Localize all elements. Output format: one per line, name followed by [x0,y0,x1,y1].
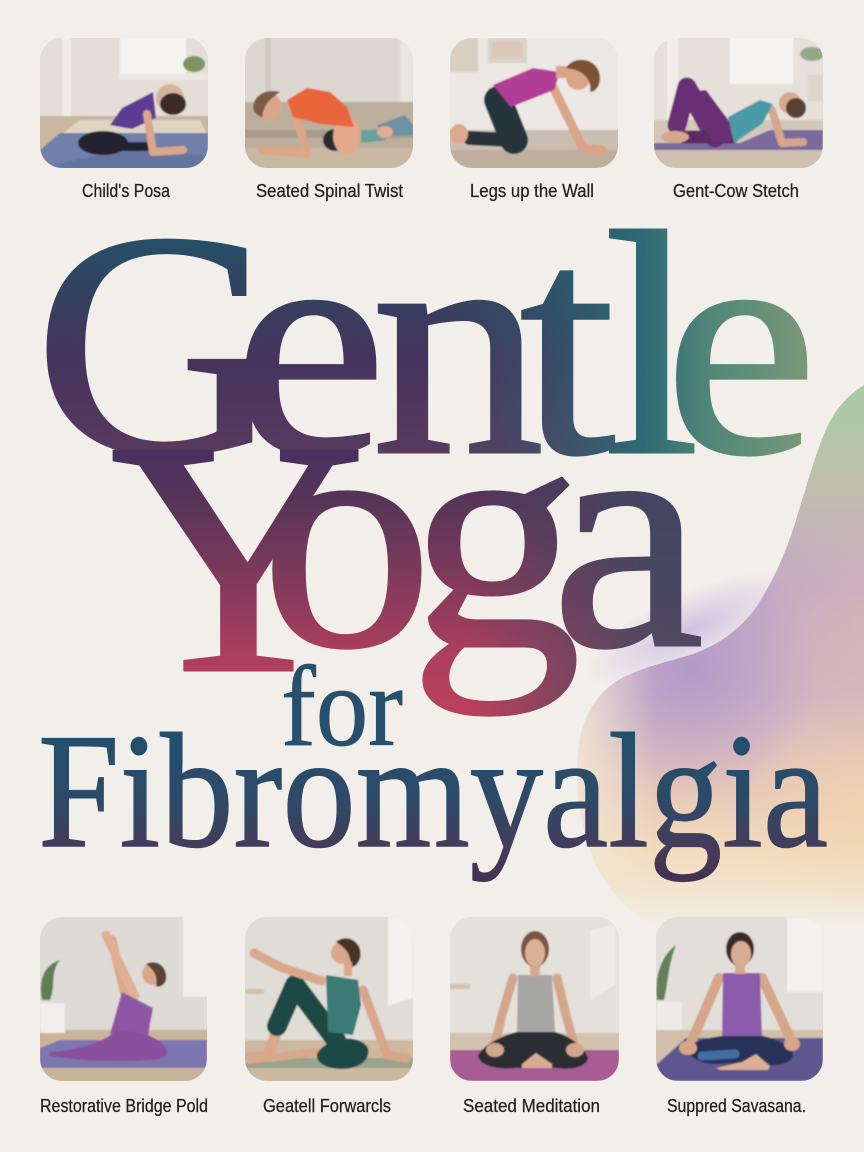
label: Gent-Cow Stetch: Gent-Cow Stetch [673,181,799,201]
pose card: Legs up the Wall [448,36,620,201]
label: Seated Spinal Twist: Seated Spinal Twist [256,181,403,201]
label: Restorative Bridge Pold: Restorative Bridge Pold [40,1096,208,1116]
pose card: Seated Spinal Twist [243,36,415,201]
label: Legs up the Wall: Legs up the Wall [470,181,594,201]
pose card: Restorative Bridge Pold [38,915,209,1116]
photo: gentle forward [243,915,415,1083]
label: Geatell Forwarcls: Geatell Forwarcls [263,1096,391,1116]
panel: top row of poses [38,36,825,201]
photo: restorative bridge [38,915,209,1083]
title line: Gentle: Gentle [34,168,818,522]
photo: legs up the wall [448,36,620,170]
label: Seated Meditation: Seated Meditation [463,1096,600,1116]
photo: seated meditation [448,915,621,1083]
panel: bottom row of poses [38,915,825,1116]
title line: Yoga: Y [110,373,366,743]
title line: Yoga: oga [261,357,704,716]
photo: cat-cow stretch [652,36,825,170]
title [34,168,828,882]
pose card: Child's Pose [38,36,210,201]
pose card: Seated Meditation [448,915,621,1116]
label: Suppred Savasana.: Suppred Savasana. [667,1096,806,1116]
title line: for: for [281,643,403,770]
photo: child's pose [38,36,210,170]
photo: seated spinal twist [243,36,415,170]
pose card: Suppred Savasana. [654,915,825,1116]
pose card: Geatell Forwarcls [243,915,415,1116]
label: Child's Posa: Child's Posa [82,181,171,201]
photo: supported savasana [654,915,825,1083]
background gradient blob [560,380,864,940]
pose card: Gent-Cow Stetch [652,36,825,201]
